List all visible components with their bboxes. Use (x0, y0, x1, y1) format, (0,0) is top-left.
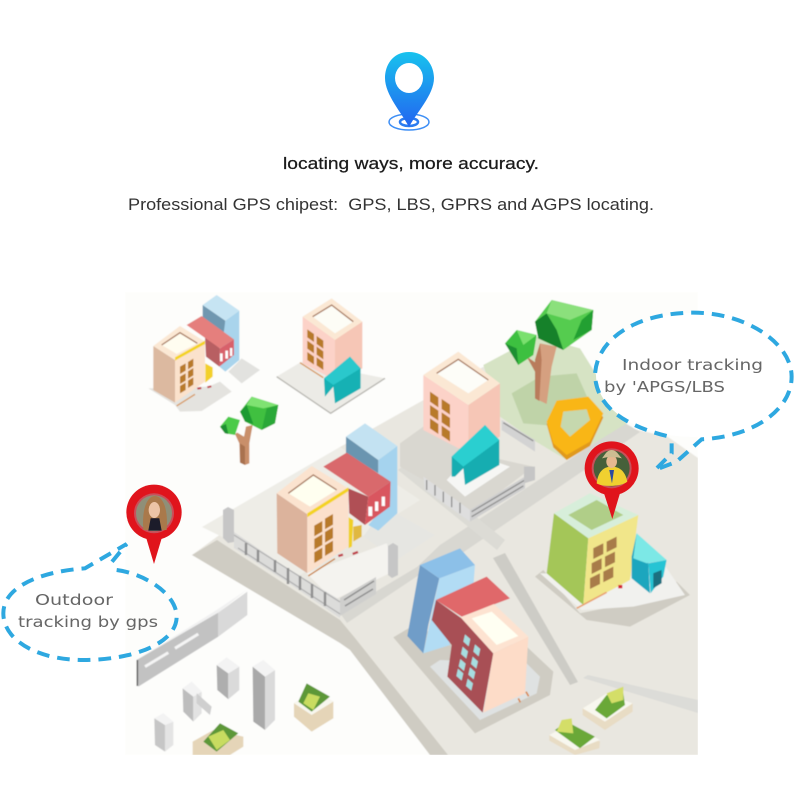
pin: indoor user (585, 441, 639, 519)
callout: outdoor tracking: tracking by gps (18, 613, 158, 631)
green lawn with gold shape and large tree (483, 300, 627, 460)
planters: bottom right (549, 687, 633, 755)
isometric city map (125, 292, 698, 755)
building: yellow-green with teal annex (535, 493, 690, 627)
heading: locating ways, more accuracy. (283, 154, 539, 173)
fence around central plaza (223, 507, 398, 618)
building: centre with blue tower and red block (277, 423, 435, 600)
building: top left (148, 295, 260, 412)
callout: indoor tracking (595, 313, 792, 470)
callout: indoor tracking: Indoor tracking (622, 356, 763, 374)
small tree (220, 397, 278, 465)
ground and roads (192, 345, 698, 755)
building: bottom centre red and blue (393, 548, 553, 733)
pin: outdoor user (126, 485, 182, 564)
callout: outdoor tracking (3, 544, 177, 660)
callout: outdoor tracking: Outdoor (35, 591, 114, 609)
street furniture: wall, posts and planters (137, 590, 333, 755)
icon: location pin (385, 52, 434, 130)
subheading: Professional GPS chipest: GPS, LBS, GPRS and AGPS locating. (128, 195, 654, 214)
callout: indoor tracking: by 'APGS/LBS (604, 378, 725, 396)
building: top centre with teal annex (277, 298, 385, 413)
building: right plaza with teal annex (400, 352, 535, 522)
